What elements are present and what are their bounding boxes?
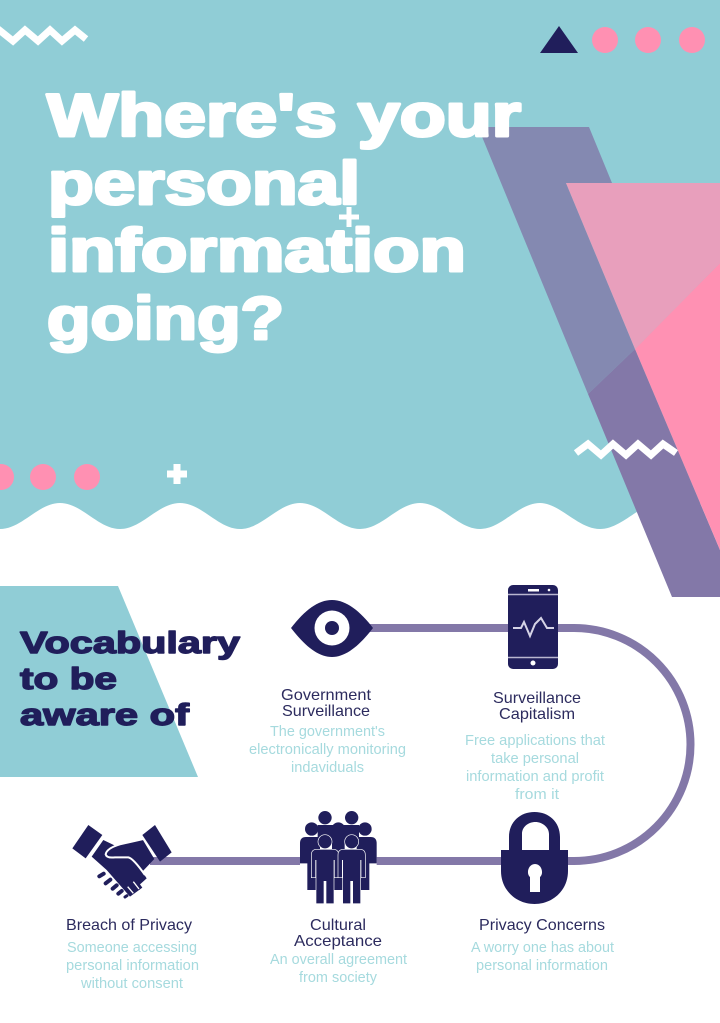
term description: personal information bbox=[66, 958, 199, 974]
term description: electronically monitoring bbox=[249, 742, 406, 758]
title bbox=[47, 82, 521, 352]
term: Surveillance Capitalism bbox=[465, 690, 605, 803]
term description: take personal bbox=[491, 751, 579, 767]
term heading bbox=[281, 687, 372, 720]
icon: padlock bbox=[501, 812, 568, 904]
term heading: Privacy Concerns bbox=[479, 917, 605, 934]
term heading: Surveillance bbox=[282, 703, 370, 720]
icon: smartphone with waveform bbox=[508, 585, 558, 669]
icon: eye bbox=[291, 600, 373, 657]
term: Government Surveillance bbox=[249, 687, 406, 776]
term description bbox=[270, 952, 407, 986]
teal header background with wavy bottom edge bbox=[0, 0, 720, 529]
plus icon bbox=[167, 464, 187, 484]
term description: personal information bbox=[476, 958, 608, 974]
small plus over title bbox=[339, 207, 359, 227]
pink dots bottom left bbox=[0, 464, 100, 490]
term: Breach of Privacy bbox=[66, 917, 199, 992]
term description: information and profit bbox=[466, 769, 604, 785]
title: information bbox=[48, 217, 466, 284]
term heading: Surveillance bbox=[493, 690, 581, 707]
vocabulary heading bbox=[20, 625, 241, 732]
term heading bbox=[294, 917, 382, 950]
term description bbox=[249, 724, 406, 776]
icon: handshake bbox=[72, 825, 172, 897]
term description: indaviduals bbox=[291, 760, 364, 776]
term heading: Cultural bbox=[310, 917, 366, 934]
term description: A worry one has about bbox=[471, 940, 614, 956]
term: Cultural Acceptance bbox=[270, 917, 407, 986]
icon: group of people bbox=[300, 811, 377, 903]
zigzag top left bbox=[0, 29, 86, 41]
title: personal bbox=[48, 150, 360, 217]
term heading: Government bbox=[281, 687, 372, 704]
zigzag right bbox=[576, 444, 676, 455]
term heading: Capitalism bbox=[499, 706, 575, 723]
title: Where's your bbox=[47, 82, 521, 149]
vocabulary heading: to be bbox=[20, 661, 117, 696]
term description bbox=[66, 940, 199, 992]
vocabulary heading: Vocabulary bbox=[20, 625, 241, 660]
term: Privacy Concerns bbox=[471, 917, 614, 974]
term description: The government's bbox=[270, 724, 385, 740]
term description: An overall agreement bbox=[270, 952, 407, 968]
abstract overlapping shapes bbox=[478, 127, 720, 597]
term description: from society bbox=[299, 970, 378, 986]
term description: Someone accessing bbox=[67, 940, 197, 956]
pink dots top right bbox=[592, 27, 705, 53]
term description bbox=[465, 733, 605, 803]
term description: from it bbox=[515, 787, 559, 803]
term description: without consent bbox=[80, 976, 183, 992]
navy triangle bbox=[540, 26, 578, 53]
term description bbox=[471, 940, 614, 974]
vocabulary heading: aware of bbox=[20, 697, 190, 732]
term heading: Breach of Privacy bbox=[66, 917, 192, 934]
term description: Free applications that bbox=[465, 733, 605, 749]
title: going? bbox=[47, 285, 284, 352]
connecting path bbox=[150, 628, 690, 861]
vocabulary panel background bbox=[0, 586, 198, 777]
term heading: Acceptance bbox=[294, 933, 382, 950]
term heading bbox=[493, 690, 581, 723]
